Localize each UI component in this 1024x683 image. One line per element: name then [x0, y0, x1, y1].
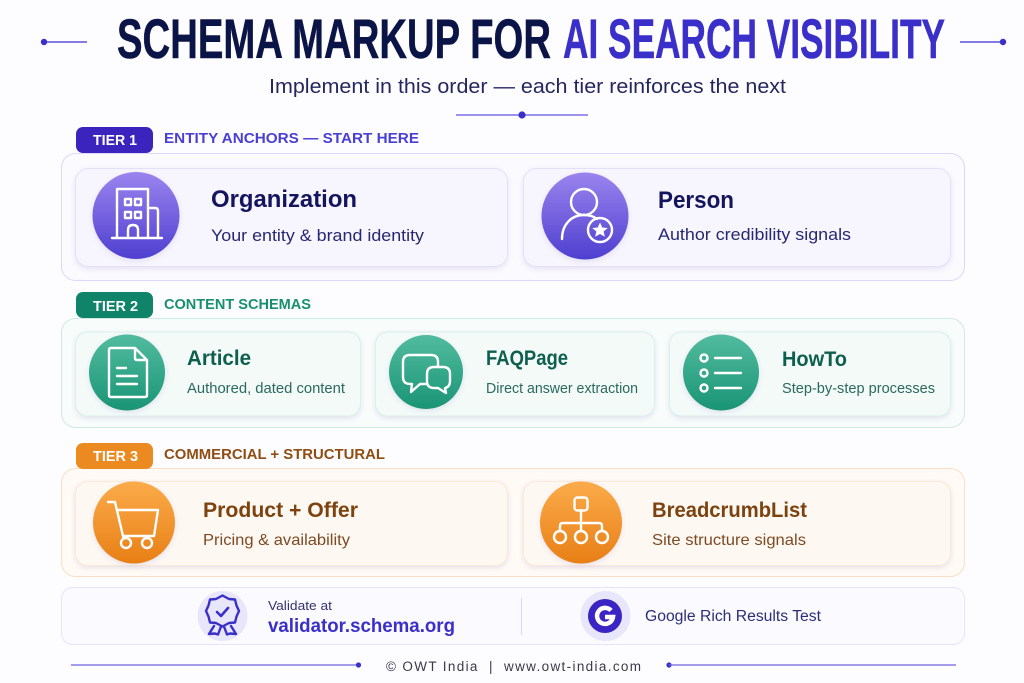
- organization description: Your entity & brand identity: [211, 226, 425, 245]
- icon: award ribbon check: [198, 591, 248, 641]
- breadcrumblist description: Site structure signals: [652, 532, 806, 549]
- howto title: HowTo: [782, 348, 847, 371]
- person title: Person: [658, 187, 734, 214]
- tier 2 badge: [76, 292, 153, 318]
- article description: Authored, dated content: [187, 381, 345, 397]
- card: faqpage: [376, 332, 654, 416]
- subtitle: Implement in this order — each tier reinforces the next: [269, 76, 786, 98]
- panel: tier 3: [62, 443, 964, 576]
- subtitle ornament: [456, 111, 588, 119]
- footer: [71, 659, 956, 674]
- card: person: [524, 168, 950, 266]
- panel: tier 2: [62, 292, 964, 428]
- footer: © OWT India | www.owt-india.com: [386, 659, 641, 674]
- article title: Article: [187, 347, 251, 370]
- icon: shopping cart: [93, 482, 175, 564]
- icon: step list: [683, 334, 759, 410]
- icon: google g: [580, 591, 630, 641]
- card: organization: [76, 168, 508, 266]
- divider: [520, 598, 522, 635]
- tier 1 badge: [76, 127, 153, 153]
- product description: Pricing & availability: [203, 532, 350, 549]
- tier 3 badge: [76, 443, 153, 469]
- panel: validation tools: [62, 588, 964, 644]
- faqpage description: Direct answer extraction: [486, 381, 638, 397]
- card: breadcrumblist: [524, 482, 950, 566]
- validate label: Validate at: [268, 598, 332, 613]
- icon: site hierarchy: [540, 482, 622, 564]
- icon: person with star: [542, 172, 628, 260]
- icon: building: [92, 172, 180, 259]
- tier 3 badge: TIER 3: [93, 449, 138, 465]
- card: product + offer: [76, 482, 508, 566]
- product title: Product + Offer: [203, 499, 358, 522]
- card: article: [76, 332, 360, 416]
- title ornament: left: [41, 39, 87, 45]
- icon: chat bubbles: [389, 335, 463, 409]
- tier 2 heading: CONTENT SCHEMAS: [164, 297, 311, 313]
- validator url: validator.schema.org: [268, 616, 455, 637]
- person description: Author credibility signals: [658, 225, 851, 244]
- google rich results label: Google Rich Results Test: [645, 608, 822, 625]
- organization title: Organization: [211, 186, 357, 213]
- title ornament: right: [960, 39, 1006, 45]
- panel: tier 1: [62, 127, 964, 280]
- card: howto: [670, 332, 950, 416]
- breadcrumblist title: BreadcrumbList: [652, 499, 807, 522]
- tier 1 heading: ENTITY ANCHORS — START HERE: [164, 131, 419, 147]
- tier 1 badge: TIER 1: [93, 133, 137, 149]
- howto description: Step-by-step processes: [782, 381, 935, 397]
- title: SCHEMA MARKUP FOR: [117, 7, 551, 70]
- faqpage title: FAQPage: [486, 347, 568, 370]
- tier 2 badge: TIER 2: [93, 299, 138, 315]
- icon: document: [89, 334, 165, 410]
- tier 3 heading: COMMERCIAL + STRUCTURAL: [164, 447, 385, 463]
